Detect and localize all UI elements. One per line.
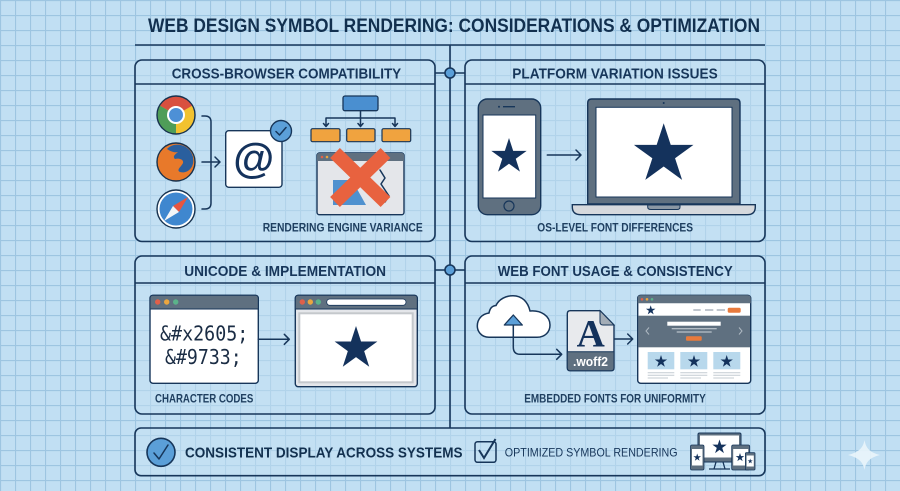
caption: character codes: CHARACTER CODES (155, 392, 253, 406)
code window: &#9733; (165, 345, 242, 369)
heading: unicode and implementation: UNICODE & IMPLEMENTATION (184, 263, 386, 280)
central connector lines (135, 45, 765, 428)
heading: cross-browser compatibility: CROSS-BROWSER COMPATIBILITY (172, 65, 401, 82)
icon: red cross (335, 153, 386, 202)
icon: chrome (157, 96, 195, 134)
rendered star window (295, 295, 417, 387)
panel: bottom summary bar (135, 428, 765, 476)
code window (150, 295, 258, 383)
broken browser window (317, 153, 404, 215)
icon: cloud upload (477, 296, 562, 359)
text: consistent display across systems: CONSISTENT DISPLAY ACROSS SYSTEMS (185, 445, 462, 462)
website mockup (638, 295, 751, 383)
icon: woff2 font file: .woff2 (573, 354, 608, 369)
panel: unicode and implementation (135, 256, 435, 414)
icon: woff2 font file (567, 311, 614, 371)
heading: web font usage and consistency: WEB FONT USAGE & CONSISTENCY (498, 263, 733, 280)
icon: checkbox (475, 439, 496, 462)
panel: web font usage and consistency (465, 256, 765, 414)
icon: safari (157, 190, 195, 228)
card: at symbol: @ (233, 134, 274, 182)
caption: embedded fonts for uniformity: EMBEDDED FONTS FOR UNIFORMITY (524, 392, 706, 406)
bracket arrow (202, 116, 220, 209)
heading: platform variation issues: PLATFORM VARIATION ISSUES (512, 65, 718, 82)
icon: sparkle watermark (848, 440, 880, 470)
arrow: font to website (615, 334, 633, 344)
code window: &#x2605; (160, 322, 248, 346)
card: at symbol (226, 131, 282, 187)
icon: responsive devices (690, 433, 755, 470)
panel: platform variation issues (465, 60, 765, 242)
icon: check circle (147, 438, 175, 466)
text: optimized symbol rendering: OPTIMIZED SYMBOL RENDERING (505, 446, 678, 460)
arrow: code to render (258, 334, 289, 344)
caption: os-level font differences: OS-LEVEL FONT DIFFERENCES (537, 221, 693, 235)
icon: laptop (572, 99, 755, 215)
icon: firefox (157, 143, 195, 181)
icon: check badge (270, 120, 292, 142)
icon: woff2 font file: A (577, 313, 605, 356)
title: WEB DESIGN SYMBOL RENDERING: CONSIDERATIONS & OPTIMIZATION (148, 16, 760, 37)
icon: phone (478, 99, 541, 215)
caption: rendering engine variance: RENDERING ENGINE VARIANCE (263, 221, 423, 235)
panel: cross-browser compatibility (135, 60, 435, 242)
arrow: phone to laptop (547, 150, 581, 160)
hierarchy diagram (311, 96, 411, 142)
